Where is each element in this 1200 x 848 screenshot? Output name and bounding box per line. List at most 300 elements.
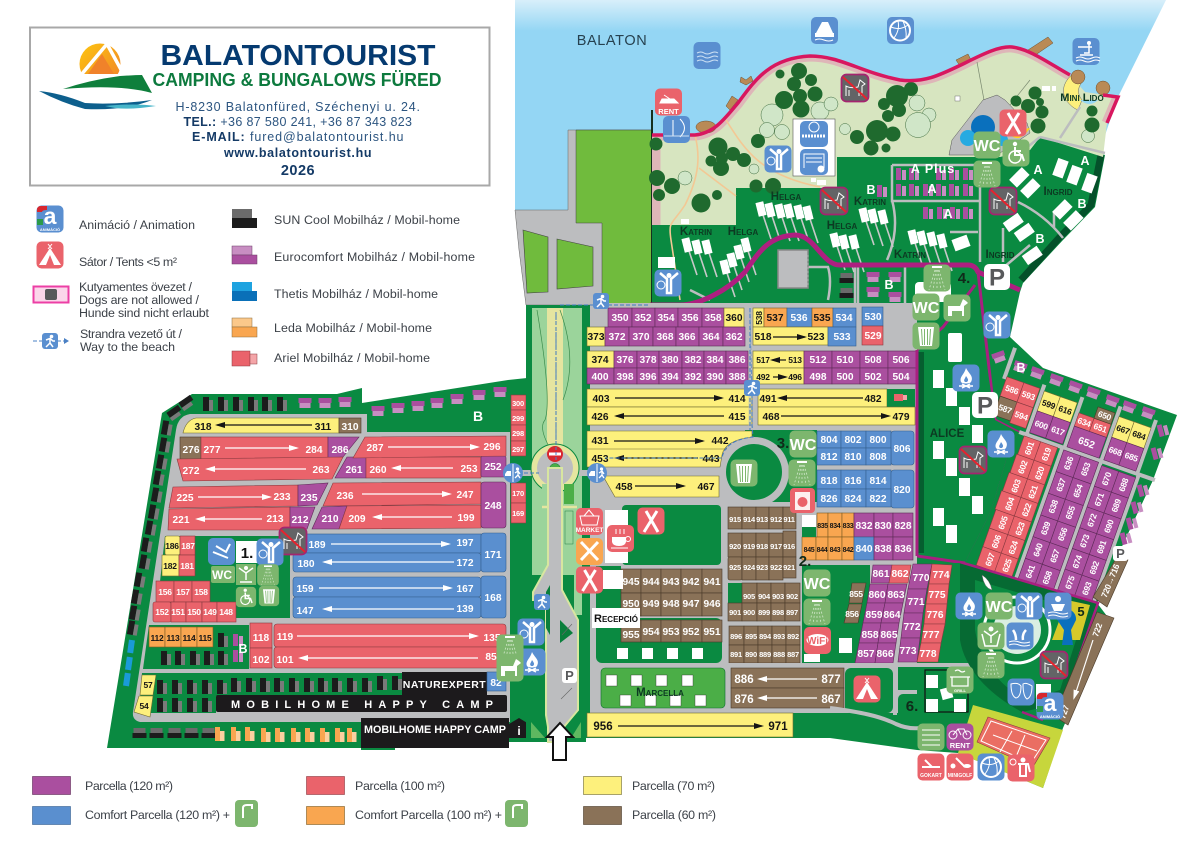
parcels 276-296: 263 bbox=[312, 465, 330, 476]
parcels 586-594: 594 bbox=[1013, 409, 1030, 423]
icons: wash block 3 and 2 bbox=[730, 430, 880, 702]
zone labels: Helga bbox=[827, 220, 857, 232]
parcels 770-778: 771 bbox=[908, 597, 925, 608]
parcels 601-625: 603 bbox=[1009, 478, 1023, 494]
zone labels: Ingrid bbox=[986, 249, 1015, 261]
icon: theatre masks bbox=[1008, 678, 1034, 706]
bungalow squares near Reception bbox=[603, 510, 852, 662]
parcels 225-248: 225 bbox=[176, 493, 194, 504]
icon: WC block 2: WC bbox=[804, 576, 831, 593]
parcels row 400-388: 388 bbox=[728, 372, 746, 383]
parcels rows 517-506 and 492-504: 513 bbox=[788, 355, 802, 365]
Alice zone bbox=[917, 283, 1020, 563]
panel: sports fields bbox=[793, 119, 835, 176]
parcels 601-625: 624 bbox=[1006, 539, 1020, 556]
icon: minigolf: MINIGOLF bbox=[948, 773, 972, 779]
logo bbox=[39, 44, 156, 109]
legend: services: Way to the beach bbox=[80, 340, 175, 354]
parcel 956-971: 956 bbox=[593, 721, 613, 733]
zone labels: A bbox=[943, 207, 953, 221]
parcels row 400-388: 398 bbox=[616, 372, 634, 383]
parcels 318-310: 311 bbox=[315, 422, 332, 433]
west mobile homes along border: B bbox=[473, 408, 483, 424]
west camp base bbox=[107, 378, 527, 750]
parcels row 400-388: 394 bbox=[662, 372, 679, 383]
access roads at roundabout bbox=[511, 470, 600, 476]
west green blocks bbox=[139, 536, 402, 713]
Naturexpert label and parcel 82: NATUREXPERT bbox=[403, 679, 486, 691]
parcels 225-248: 233 bbox=[274, 492, 291, 503]
brown rows 886-867 bbox=[731, 668, 844, 708]
west road network bbox=[133, 414, 510, 722]
parcels 225-248: 212 bbox=[292, 515, 309, 526]
parcels 828-845: 840 bbox=[856, 544, 873, 555]
west mobile homes rows: B bbox=[238, 642, 248, 656]
brown parcels 941-955: 949 bbox=[642, 599, 660, 610]
icon: playground zone 1 bbox=[236, 564, 256, 585]
way to the beach routes bbox=[518, 305, 753, 473]
parcels 670-693: 672 bbox=[1085, 512, 1099, 528]
icon: cooking pot: GRILL bbox=[954, 688, 967, 693]
west small parcels: 54 bbox=[140, 701, 149, 711]
brown parcels 887-905: 896 bbox=[730, 632, 742, 641]
parcels 770-778: 773 bbox=[900, 646, 917, 657]
parcels 770-778: 778 bbox=[920, 649, 937, 660]
icon: water slide bbox=[811, 17, 838, 44]
reception sign: Recepció bbox=[594, 613, 638, 625]
brown parcels 941-955: 951 bbox=[704, 627, 721, 638]
west small parcels: 156 bbox=[158, 587, 172, 597]
parcels row 538-534 bbox=[753, 308, 856, 327]
parcels row 350-360: 354 bbox=[658, 313, 675, 324]
brown parcels 911-925: 923 bbox=[756, 563, 768, 572]
brown parcels 911-925: 920 bbox=[729, 542, 741, 551]
legend: mobile homes: Eurocomfort Mobilház / Mobil-home bbox=[274, 250, 475, 264]
yellow rows 431-467: 453 bbox=[592, 454, 609, 465]
parcels row 538-534: 538 bbox=[754, 311, 764, 325]
red parcels 85-135: 85 bbox=[485, 652, 497, 663]
parcels 599-617: 600 bbox=[1033, 418, 1050, 432]
marker: zone 1 bbox=[236, 541, 258, 563]
parcels row 350-360: 358 bbox=[704, 313, 722, 324]
parcels row 538-534: 537 bbox=[766, 313, 784, 324]
right column small parcels 300-169: 169 bbox=[512, 509, 524, 518]
icon: washing machine bbox=[790, 488, 815, 513]
parcels row 373-362: 373 bbox=[588, 332, 605, 343]
parcels 599-617: 599 bbox=[1041, 397, 1057, 411]
parcels 670-693: 693 bbox=[1080, 580, 1094, 597]
road surface bbox=[533, 468, 578, 742]
blue parcels 139-197: 139 bbox=[456, 604, 474, 615]
blue parcels 800-826: 824 bbox=[844, 494, 862, 505]
bottom row mobile homes bbox=[132, 727, 356, 742]
brown parcels 941-955: 945 bbox=[622, 577, 640, 588]
zone labels: B bbox=[1035, 232, 1045, 246]
parcels 225-248: 209 bbox=[348, 514, 366, 525]
icon: basketball bbox=[887, 17, 914, 44]
icon: WC pool zone bbox=[986, 592, 1013, 620]
address lines: www.balatontourist.hu bbox=[223, 146, 372, 160]
icon: kart zone card bbox=[918, 724, 944, 750]
parcels 599-617: 616 bbox=[1057, 403, 1074, 417]
parcels row 373-362: 364 bbox=[702, 332, 720, 343]
brown parcels 941-955: 952 bbox=[682, 627, 700, 638]
red parcels 85-135: 119 bbox=[277, 632, 294, 643]
west small parcels: 187 bbox=[181, 541, 195, 551]
blue parcels 139-197 bbox=[293, 533, 506, 618]
parcels 276-296 bbox=[177, 436, 506, 481]
bottom legend: parcel types: Parcella (120 m²) bbox=[85, 779, 173, 793]
parcels 601-625: 606 bbox=[989, 533, 1003, 550]
parcels 225-248: 248 bbox=[484, 501, 502, 512]
parcel 956-971: 971 bbox=[768, 721, 788, 733]
legend: mobile homes: Ariel Mobilház / Mobil-home bbox=[274, 351, 430, 365]
parcels 636-658: 637 bbox=[1054, 476, 1068, 493]
bottom legend: parcel types bbox=[32, 776, 716, 827]
parcels 318-310: 318 bbox=[194, 422, 212, 433]
brown parcels 911-925: 914 bbox=[743, 515, 756, 524]
bungalows: Helga and Katrin bbox=[681, 201, 971, 297]
icon: boat rent bbox=[655, 88, 682, 116]
parcels 670-693 bbox=[1058, 465, 1136, 602]
parcels 670-693: 688 bbox=[1117, 476, 1131, 493]
parcels 828-845: 833 bbox=[843, 523, 854, 530]
brown parcels 887-905: 898 bbox=[772, 608, 784, 617]
parcels rows 517-506 and 492-504: 506 bbox=[892, 355, 910, 366]
tennis-style court near pink road bbox=[778, 250, 808, 288]
parcels row 350-360: 352 bbox=[634, 313, 652, 324]
Marcella field: Marcella bbox=[636, 687, 684, 699]
blue parcels 139-197: 180 bbox=[298, 559, 315, 570]
brown parcels 911-925: 912 bbox=[770, 515, 782, 524]
parcels row 374-386: 380 bbox=[662, 355, 679, 366]
parcels 636-658: 658 bbox=[1040, 569, 1054, 586]
parcels row 400-388: 396 bbox=[640, 372, 657, 383]
brown parcels 887-905: 904 bbox=[758, 592, 771, 601]
parcels 855-866: 855 bbox=[849, 589, 863, 599]
legend: mobile homes: SUN Cool Mobilház / Mobil-home bbox=[274, 213, 460, 227]
blue parcels 800-826: 826 bbox=[820, 494, 838, 505]
blue parcels 800-826: 806 bbox=[894, 444, 911, 455]
zone labels bbox=[680, 154, 1090, 292]
yellow rows 403-479: 426 bbox=[592, 412, 609, 423]
brown parcels 911-925 bbox=[728, 507, 796, 580]
zone labels: Helga bbox=[771, 191, 801, 203]
bottom legend: parcel types: Parcella (70 m²) bbox=[632, 779, 715, 793]
parcels rows 517-506 and 492-504: 504 bbox=[892, 372, 910, 383]
brown parcels 911-925: 922 bbox=[770, 563, 782, 572]
parcels 667-685: 668 bbox=[1107, 444, 1124, 458]
parcels 276-296: 253 bbox=[460, 464, 478, 475]
parcels row 538-534: 536 bbox=[790, 313, 808, 324]
parcels row 373-362: 366 bbox=[678, 332, 696, 343]
parcels 636-658: 654 bbox=[1071, 482, 1085, 499]
brown parcels 911-925: 918 bbox=[756, 542, 768, 551]
legend: services: Dogs are not allowed / bbox=[79, 293, 200, 307]
right column small parcels 300-169: 299 bbox=[512, 414, 524, 423]
west small parcels: 112 bbox=[151, 633, 164, 643]
labels 2, 3, 4, 6: 3. bbox=[777, 435, 789, 452]
blue parcels 800-826: 822 bbox=[870, 494, 887, 505]
west small parcels: 182 bbox=[163, 561, 177, 571]
icon: swimmers bbox=[1006, 622, 1034, 650]
parcels 828-845: 836 bbox=[894, 544, 912, 555]
west small parcels: 148 bbox=[219, 607, 233, 617]
subtitle: CAMPING & BUNGALOWS FÜRED bbox=[152, 69, 442, 90]
parcels 599-617 bbox=[1030, 391, 1077, 444]
Mobilhome Happy Camp sign bbox=[361, 718, 509, 748]
west small parcels: 113 bbox=[167, 633, 180, 643]
blue parcels 139-197: 147 bbox=[296, 606, 314, 617]
west mobile homes rows bbox=[157, 633, 402, 712]
labels 2, 3, 4, 6 bbox=[777, 270, 970, 715]
Naturexpert label and parcel 82: 82 bbox=[490, 678, 502, 689]
parcels 667-685: 684 bbox=[1131, 428, 1147, 442]
brown parcels 941-955: 943 bbox=[662, 577, 680, 588]
parcels 276-296: 260 bbox=[370, 465, 387, 476]
parcels 670-693: 689 bbox=[1109, 497, 1123, 514]
parcels 636-658: 638 bbox=[1046, 498, 1060, 515]
parcels 276-296: 276 bbox=[182, 445, 200, 456]
small parking mark east bbox=[1113, 546, 1128, 561]
brown parcels 941-955: 948 bbox=[662, 599, 680, 610]
brown parcels 911-925: 916 bbox=[783, 542, 795, 551]
strip 720-716 bbox=[1093, 557, 1128, 607]
brown parcels 887-905: 891 bbox=[730, 650, 742, 659]
zone labels: Katrin bbox=[854, 196, 886, 208]
icon: market bbox=[576, 508, 603, 535]
icons: southeast services bbox=[918, 592, 1072, 782]
parcels 855-866: 860 bbox=[868, 590, 886, 601]
parcels 770-778: 774 bbox=[932, 570, 950, 581]
parcels 601-625: 619 bbox=[1039, 446, 1053, 462]
yellow rows 403-479 bbox=[587, 389, 915, 425]
parcels 636-658: 641 bbox=[1023, 563, 1037, 580]
reception sign bbox=[592, 608, 640, 628]
parcels row 400-388: 390 bbox=[706, 372, 724, 383]
red parcels 85-135: 118 bbox=[253, 633, 270, 644]
parcels 828-845: 834 bbox=[830, 523, 841, 530]
parcels 670-693: 675 bbox=[1063, 574, 1077, 591]
icon: hairdresser bbox=[576, 538, 603, 565]
swimming pool bbox=[949, 95, 1030, 155]
zone labels: A Plus bbox=[911, 162, 955, 176]
parcels 828-845: 835 bbox=[817, 523, 828, 530]
blue parcels 800-826: 812 bbox=[820, 452, 838, 463]
east parcels grid (rotated) bbox=[939, 347, 1181, 617]
lake Balaton bbox=[515, 0, 1166, 220]
parcels 855-866: 857 bbox=[858, 649, 875, 660]
parcels 518-523 and 533: 523 bbox=[808, 332, 825, 343]
icon: WC zone 1 bbox=[211, 566, 235, 583]
red parcels 85-135: 101 bbox=[276, 655, 294, 666]
icon: bike rent bbox=[946, 724, 974, 750]
icons: central and west services bbox=[208, 293, 760, 682]
legend: services: Hunde sind nicht erlaubt bbox=[79, 306, 210, 320]
southeast pool zone: 5 bbox=[1077, 604, 1085, 619]
east mobile homes: B bbox=[1016, 361, 1026, 375]
parcels 770-778: 770 bbox=[912, 573, 930, 584]
parcels 855-866: 862 bbox=[892, 569, 909, 580]
parcels 601-625: 601 bbox=[1022, 440, 1036, 456]
parcels row 374-386: 386 bbox=[728, 355, 746, 366]
brown parcels 887-905: 900 bbox=[743, 608, 755, 617]
icon: baby pool bbox=[1044, 592, 1072, 620]
Alice zone: ALICE bbox=[930, 428, 965, 440]
icon: dog-free zone bbox=[34, 286, 68, 302]
address lines: H-8230 Balatonfüred, Széchenyi u. 24. bbox=[176, 100, 420, 114]
strip 722-727: 722 bbox=[1090, 621, 1104, 638]
labels 2, 3, 4, 6: 4. bbox=[958, 270, 970, 287]
right column small parcels 300-169 bbox=[511, 395, 526, 523]
brown parcels 911-925: 911 bbox=[783, 515, 795, 524]
A Plus mobile homes bbox=[840, 168, 973, 341]
parcels 670-693: 692 bbox=[1087, 559, 1101, 576]
central avenue bbox=[511, 305, 600, 760]
brown parcels 911-925: 917 bbox=[770, 542, 782, 551]
icon: WC block 3: WC bbox=[790, 437, 817, 454]
Naturexpert label and parcel 82 bbox=[402, 672, 506, 696]
parcels 828-845: 838 bbox=[874, 544, 892, 555]
parcels 601-625: 602 bbox=[1016, 459, 1030, 475]
zone labels: Katrin bbox=[680, 226, 712, 238]
parcels 770-778: 776 bbox=[926, 610, 944, 621]
parcels row 373-362: 372 bbox=[608, 332, 626, 343]
parcels 770-778: 775 bbox=[928, 590, 946, 601]
west small parcels: 158 bbox=[194, 587, 208, 597]
right column small parcels 300-169: 298 bbox=[512, 429, 524, 438]
brown parcels 887-905: 887 bbox=[787, 650, 799, 659]
icon: WC block 4: WC bbox=[913, 300, 940, 317]
icon: WC block 2 bbox=[804, 570, 831, 596]
brown parcels 941-955: 947 bbox=[682, 599, 700, 610]
blue parcels 800-826: 802 bbox=[844, 435, 862, 446]
brown parcels 941-955: 942 bbox=[682, 577, 700, 588]
central parcels road base bbox=[590, 303, 917, 713]
parcels 530 and 529: 529 bbox=[864, 331, 882, 342]
Mini Lido: Mini Lido bbox=[1060, 92, 1104, 104]
parcels 855-866 bbox=[844, 565, 911, 663]
parcels 855-866: 861 bbox=[872, 569, 890, 580]
parcels 670-693: 690 bbox=[1102, 518, 1116, 534]
bottom legend: parcel types: Parcella (100 m²) bbox=[355, 779, 445, 793]
parcels rows 517-506 and 492-504: 517 bbox=[756, 355, 770, 365]
blue parcels 800-826: 808 bbox=[870, 452, 887, 463]
legend: services: Kutyamentes övezet / bbox=[79, 280, 193, 294]
yellow rows 403-479: 482 bbox=[864, 394, 882, 405]
zone labels: Helga bbox=[728, 226, 758, 238]
icon: cafe bbox=[607, 525, 634, 552]
brown rows 886-867: 876 bbox=[734, 694, 754, 706]
Mobilhome Happy Camp band: MOBILHOME HAPPY CAMP bbox=[231, 699, 493, 711]
brown parcels 887-905: 889 bbox=[759, 650, 771, 659]
brown parcels 911-925: 915 bbox=[729, 515, 741, 524]
right column small parcels 300-169: 300 bbox=[512, 399, 524, 408]
parcels 586-594: 586 bbox=[1004, 383, 1020, 397]
small white huts bbox=[681, 86, 1056, 224]
parcels 586-594: 587 bbox=[997, 402, 1014, 416]
pink dog-free boundary along the shore bbox=[652, 47, 1118, 135]
zone labels: B bbox=[1077, 197, 1087, 211]
brown parcels 941-955: 946 bbox=[704, 599, 721, 610]
lower verge strips bbox=[531, 596, 581, 738]
parcels 770-778: 772 bbox=[904, 622, 921, 633]
west small parcels: 149 bbox=[203, 607, 217, 617]
icon: WC block 4 bbox=[912, 294, 940, 320]
parcels 828-845: 830 bbox=[874, 521, 892, 532]
brown parcels 911-925: 925 bbox=[729, 563, 741, 572]
parcels row 400-388: 400 bbox=[592, 372, 609, 383]
parcels 828-845: 832 bbox=[856, 521, 873, 532]
parcels 276-296: 277 bbox=[204, 445, 221, 456]
icon: WC pool bbox=[974, 132, 1001, 158]
west small parcels: 186 bbox=[165, 541, 179, 551]
parcels 634-652: 651 bbox=[1092, 421, 1109, 435]
parcels 634-652: 652 bbox=[1076, 436, 1096, 452]
blue parcels 139-197: 159 bbox=[296, 584, 314, 595]
parcels 318-310: 310 bbox=[342, 422, 359, 433]
bottom legend: parcel types: Parcella (60 m²) bbox=[632, 808, 716, 822]
brown parcels 941-955 bbox=[621, 569, 722, 642]
right column small parcels 300-169: 297 bbox=[512, 445, 524, 454]
brown parcels 887-905: 899 bbox=[758, 608, 770, 617]
parcels row 374-386: 376 bbox=[616, 355, 634, 366]
parcels row 374-386: 378 bbox=[640, 355, 657, 366]
southeast pool zone bbox=[960, 562, 1098, 720]
parcels rows 517-506 and 492-504: 492 bbox=[756, 372, 770, 382]
parcels 828-845 bbox=[802, 513, 913, 560]
parcels 518-523 and 533 bbox=[753, 327, 856, 346]
parcels 634-652 bbox=[1067, 402, 1115, 458]
brown parcels 911-925: 913 bbox=[756, 515, 768, 524]
info sign bbox=[509, 718, 529, 738]
yellow rows 403-479: 479 bbox=[892, 412, 910, 423]
parcels 855-866: 866 bbox=[876, 649, 894, 660]
Marcella field bbox=[601, 668, 725, 708]
parcels row 374-386: 382 bbox=[684, 355, 702, 366]
parcels 636-658: 655 bbox=[1063, 504, 1077, 521]
parcels row 374-386 bbox=[587, 351, 748, 368]
parcels row 350-360: 360 bbox=[726, 313, 743, 324]
icon: waterski bbox=[1072, 38, 1100, 65]
blue parcels 800-826: 814 bbox=[870, 476, 887, 487]
red parcels 85-135: 135 bbox=[484, 633, 501, 644]
brown parcels 911-925: 921 bbox=[783, 563, 795, 572]
parcels 670-693: 670 bbox=[1100, 470, 1114, 487]
parcels 225-248: 213 bbox=[266, 514, 284, 525]
strip 722-727: 727 bbox=[1057, 703, 1071, 720]
parcels 601-625: 620 bbox=[1033, 465, 1047, 481]
parcels 670-693: 673 bbox=[1078, 533, 1092, 549]
pink boundary road bbox=[650, 235, 1020, 305]
brown parcels 887-905: 893 bbox=[773, 632, 785, 641]
parcels 667-685: 667 bbox=[1115, 423, 1131, 437]
strip 720-716: 720→716 bbox=[1099, 562, 1122, 599]
parcels 636-658: 636 bbox=[1062, 455, 1076, 471]
icon: basketball south bbox=[978, 754, 1004, 780]
parcels rows 517-506 and 492-504: 496 bbox=[788, 372, 802, 382]
parcels 225-248 bbox=[168, 482, 506, 530]
icon: WC pool: WC bbox=[974, 138, 1001, 155]
legend: services bbox=[33, 203, 210, 354]
main green campground base bbox=[586, 137, 1177, 788]
yellow rows 431-467: 467 bbox=[698, 482, 715, 493]
west small parcels: 151 bbox=[171, 607, 185, 617]
icon: WC pool zone: WC bbox=[986, 599, 1013, 616]
company name: BALATONTOURIST bbox=[160, 40, 436, 72]
yellow rows 431-467 bbox=[587, 431, 752, 497]
parcels rows 517-506 and 492-504: 512 bbox=[810, 355, 827, 366]
